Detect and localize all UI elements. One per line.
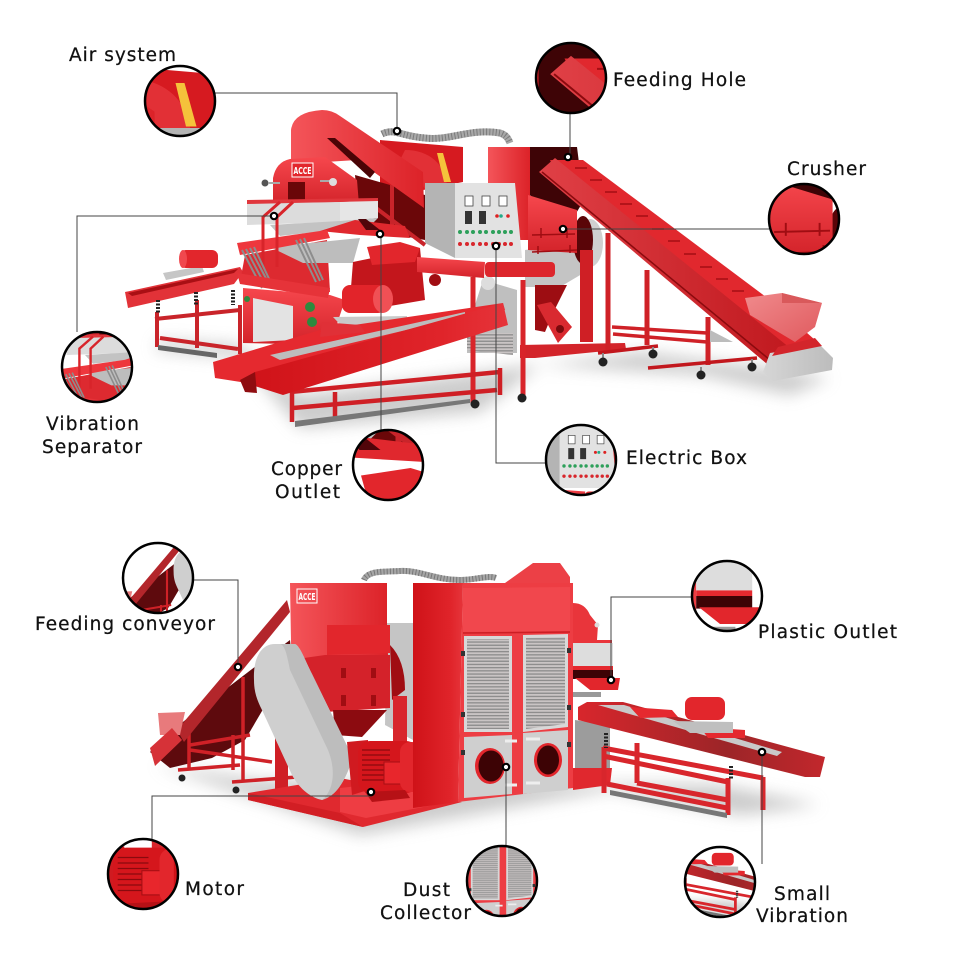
base frame [248,778,462,827]
label: copper outlet: Copper [271,459,342,480]
label: electric box: Electric Box [626,448,747,469]
inset: air system [144,64,216,138]
gray belt guard [254,644,353,800]
inset: small vibration [684,846,756,918]
label: crusher: Crusher [787,159,866,180]
leader lines [77,93,769,864]
ground shadow [155,765,820,835]
separator hood with ACCE logo [262,157,359,205]
label: small vibration: Small [774,884,830,905]
inset: electric box [544,424,618,496]
flexible air hose [364,571,496,580]
inclined feeding conveyor [539,158,815,380]
inset: plastic outlet [690,560,764,632]
vibration separator box [237,198,410,298]
gray silo and springs [467,280,517,355]
label: feeding hole: Feeding Hole [613,70,746,91]
label: air system: Air system [69,45,176,66]
label: small vibration: Vibration [756,906,848,927]
inset: crusher [768,182,840,256]
label: motor: Motor [185,879,244,900]
crusher box with ACCE logo [275,583,413,795]
copper outlet troughs [213,303,508,427]
inset: dust collector [466,844,538,918]
conveyor feed hopper [745,293,833,381]
machine: front view [125,110,833,428]
electric box [425,183,522,258]
anchor dots [235,128,765,795]
ground shadows [155,340,830,428]
bottom feeding conveyor [150,600,297,794]
label: dust collector: Collector [380,903,471,924]
label: copper outlet: Outlet [275,482,340,503]
inset: vibration separator [60,330,134,404]
dust collector cabinet [413,563,573,808]
separator side housing [573,603,620,790]
air duct arch [291,110,424,208]
electric motor [347,740,422,802]
flexible air hose [382,132,510,143]
crusher [488,147,626,358]
inset: feeding conveyor [122,542,194,614]
dark frame under duct [355,175,425,245]
central cabinet [243,288,345,345]
red hopper under separator [240,238,425,306]
small vibration conveyor [578,697,825,818]
vibration motor on trough [333,285,407,338]
label: plastic outlet: Plastic Outlet [758,622,897,643]
label: vibration separator: Vibration [46,414,139,435]
inset: copper outlet [352,428,424,502]
inset: feeding hole [534,42,608,114]
inset: motor [106,838,180,910]
left discharge conveyor [125,250,243,358]
label: dust collector: Dust [403,880,450,901]
label: vibration separator: Separator [42,437,142,458]
blower with yellow stripe [380,140,463,190]
separator hood with ACCE logo: ACCE [294,166,312,177]
machine: rear view [150,563,825,835]
upper horizontal conveyor and legs [417,257,555,408]
label: feeding conveyor: Feeding conveyor [35,614,215,635]
crusher box with ACCE logo: ACCE [298,592,316,603]
